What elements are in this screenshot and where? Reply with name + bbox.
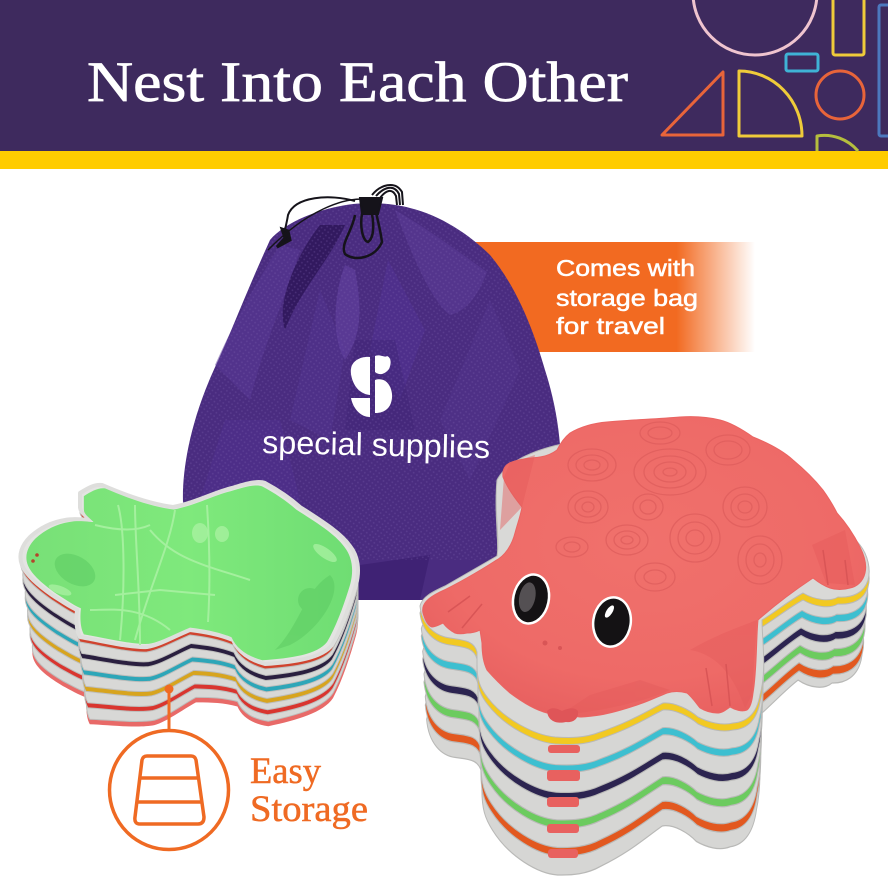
drawstring storage bag <box>183 185 560 600</box>
frog stack <box>420 417 869 884</box>
brand logo <box>351 355 392 417</box>
bag mesh texture <box>183 203 560 560</box>
stacking icon <box>110 730 228 850</box>
frog skin whorls <box>556 422 782 591</box>
frog shading <box>500 455 855 715</box>
stacked rims <box>20 482 358 754</box>
bag brand name: special supplies <box>262 424 491 465</box>
frog left eye <box>507 570 555 628</box>
frog tongue <box>547 708 578 723</box>
pointer line and dot <box>164 684 174 732</box>
easy storage callout <box>110 684 368 850</box>
callout banner: storage bag: storage bag <box>556 285 698 311</box>
small marks near the snout <box>31 553 39 563</box>
callout banner: storage bag: Comes with <box>556 255 695 281</box>
green top tray <box>26 485 352 660</box>
decorative geometric shapes <box>662 0 888 151</box>
easy storage label: Storage <box>250 789 368 830</box>
title: Nest Into Each Other <box>87 51 628 114</box>
tray inner relief <box>90 505 250 645</box>
frog nostrils <box>542 640 562 650</box>
easy storage label: Easy <box>250 751 321 792</box>
coral tongues on stacked layers <box>547 745 580 858</box>
stacked rims with coloured bands <box>420 440 869 884</box>
coral base tray <box>32 532 358 759</box>
callout banner: storage bag <box>475 242 755 352</box>
header banner <box>0 0 888 169</box>
left stack of nested trays <box>20 482 358 759</box>
bag folds <box>200 210 520 600</box>
callout banner: storage bag: for travel <box>556 313 665 339</box>
frog right eye <box>589 593 635 651</box>
bag cord and toggle <box>268 185 403 258</box>
frog toes <box>448 550 848 706</box>
frog body <box>423 417 866 717</box>
